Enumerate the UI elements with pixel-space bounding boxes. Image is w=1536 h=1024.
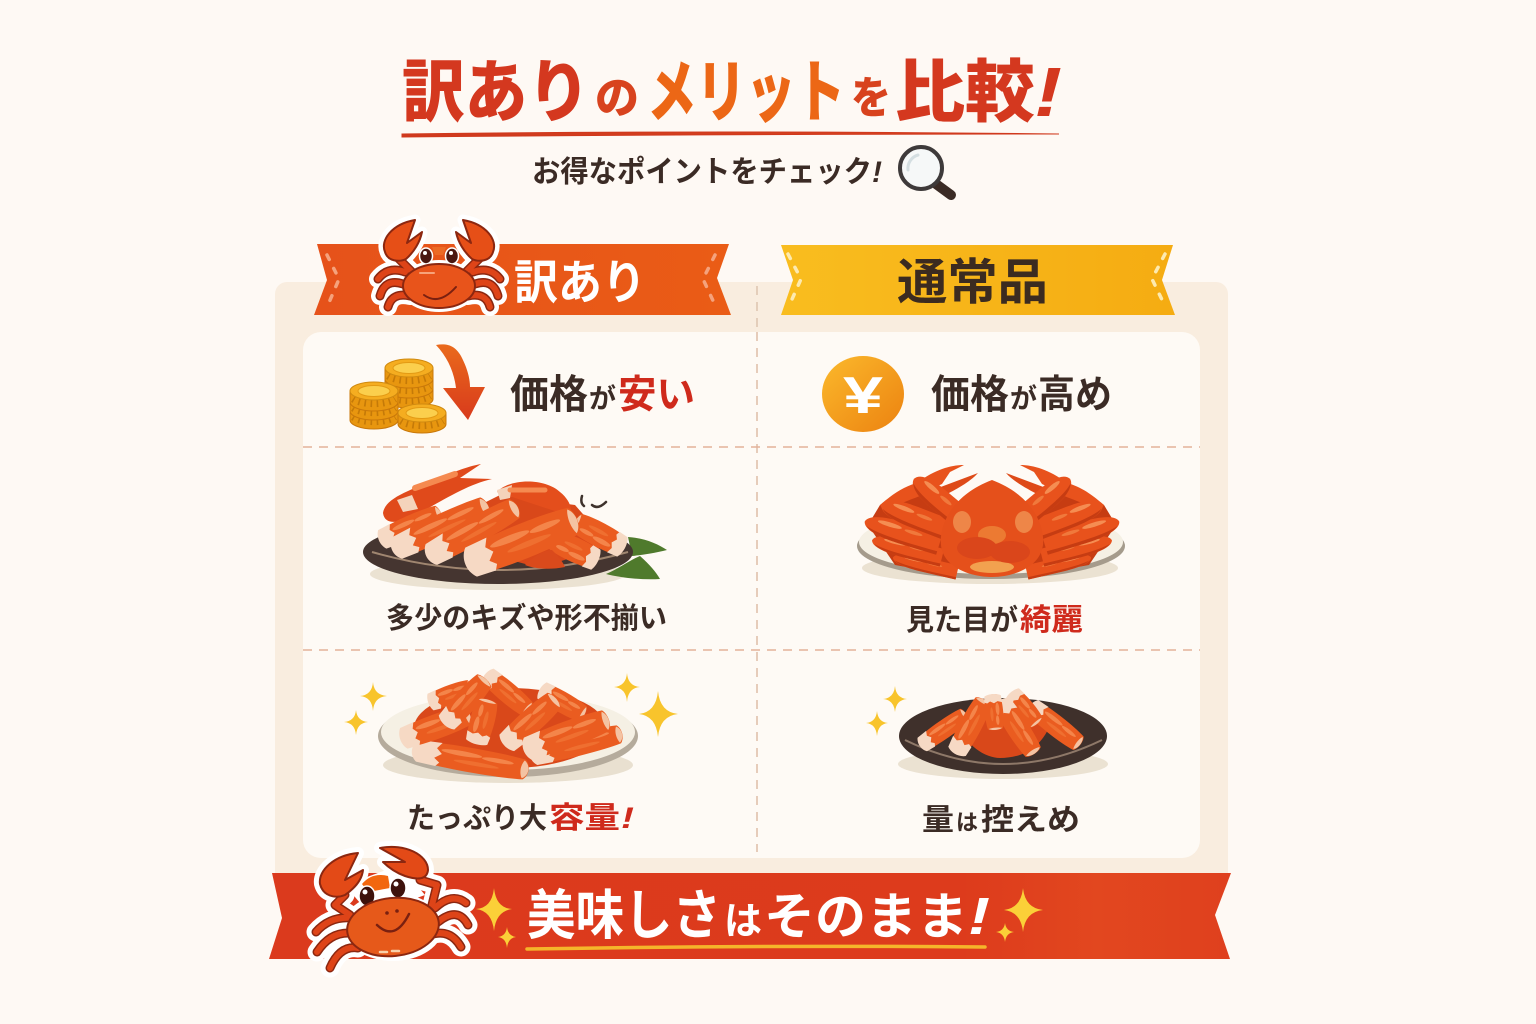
ribbon: bottom banner (269, 873, 1231, 959)
banner text: は (724, 901, 762, 943)
title: の (595, 74, 639, 123)
text: 価格が高め: 高め (1038, 374, 1112, 417)
ribbon: 通常品 header (781, 245, 1175, 315)
caption: 多少のキズや形不揃い: 多少のキズや形不揃い (386, 601, 667, 635)
illustration: large portion on white plate (378, 666, 638, 783)
banner text: 美味しさ (527, 886, 721, 946)
text: 価格が安い (510, 373, 695, 417)
text: 価格が安い: が (589, 383, 616, 414)
title: を (851, 74, 891, 123)
icon: crab mascot bottom (316, 847, 468, 968)
title underline (402, 132, 1059, 137)
icon: sparkles right of large portion (614, 673, 678, 737)
title: メリット (647, 55, 845, 131)
text: 価格が高め: 価格 (931, 373, 1009, 417)
caption: たっぷり大容量!: たっぷり大 (407, 802, 547, 835)
header text: 訳あり: 訳あり (514, 256, 646, 309)
panel: comparison inner (303, 332, 1200, 858)
text: 価格が安い: 安い (618, 374, 695, 417)
caption: 量は控えめ (922, 804, 1080, 837)
caption: たっぷり大容量! (407, 802, 634, 835)
title: ! (1034, 53, 1062, 131)
text: 価格が高め: が (1010, 383, 1037, 414)
panel: comparison background (275, 282, 1228, 892)
illustration: damaged crab legs on dark plate (363, 464, 667, 590)
text: 価格が高め (931, 373, 1112, 417)
title (402, 53, 1062, 131)
caption: たっぷり大容量!: ! (621, 802, 634, 835)
subtitle: お得なポイントをチェック (532, 156, 872, 189)
caption: 量は控えめ: 控えめ (981, 804, 1080, 837)
caption: 量は控えめ: は (956, 810, 978, 835)
caption: 量は控えめ: 量 (922, 804, 954, 837)
title: 比較 (895, 55, 1035, 131)
caption: 見た目が綺麗: 見た目が (906, 603, 1018, 637)
text: 価格が安い: 価格 (510, 373, 588, 417)
caption: 見た目が綺麗: 綺麗 (1020, 604, 1083, 637)
caption: たっぷり大容量!: 容量 (549, 802, 620, 835)
icon: sparkles banner left (476, 888, 516, 948)
icon: crab mascot top (378, 220, 500, 312)
illustration: small portion on dark plate (898, 686, 1108, 779)
banner text (527, 886, 990, 946)
icon: yen coin (822, 356, 904, 432)
ribbon: 訳あり header (314, 244, 731, 315)
illustration: whole crab on plate (857, 465, 1125, 584)
icon: sparkles left of large portion (344, 682, 387, 735)
icon: coins with down arrow (350, 344, 485, 433)
subtitle: ! (872, 156, 882, 189)
caption: 見た目が綺麗 (906, 603, 1083, 637)
icon: sparkles banner right (996, 888, 1043, 942)
banner text: そのまま (764, 889, 968, 945)
banner text: ! (968, 888, 990, 946)
icon: yen coin: ¥ (843, 367, 883, 425)
header text: 通常品: 通常品 (897, 256, 1048, 310)
icon: magnifier (900, 147, 951, 195)
title: 訳あり (402, 55, 590, 131)
icon: sparkles left of small portion (866, 686, 907, 736)
